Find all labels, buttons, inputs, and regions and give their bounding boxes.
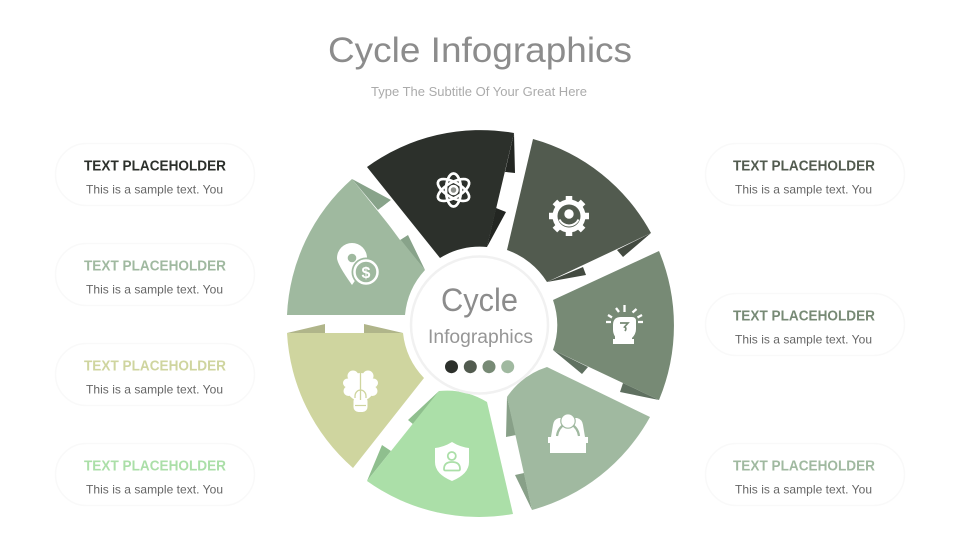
panel: left item 2: TEXT PLACEHOLDER xyxy=(84,258,226,274)
icon: shield with person xyxy=(435,442,469,481)
notch masks xyxy=(325,172,523,333)
panel: right item 3 xyxy=(706,444,904,506)
segment: dark with atom icon xyxy=(367,130,515,258)
icon: gear with person xyxy=(549,196,589,236)
panel: right item 2: This is a sample text. You xyxy=(735,332,872,346)
panel: left item 2: This is a sample text. You xyxy=(86,282,223,296)
panel: left item 4: This is a sample text. You xyxy=(86,482,223,496)
icon: raised fist with rays xyxy=(606,305,643,344)
icon: speaker at podium xyxy=(548,414,588,453)
panel: left item 4 xyxy=(56,444,254,506)
segment: olive with gear icon xyxy=(507,139,651,282)
panel: left item 1 xyxy=(56,144,254,206)
center subtitle: Infographics xyxy=(428,327,533,348)
panel: left item 2 xyxy=(56,244,254,306)
panel: left item 3 xyxy=(56,344,254,406)
subtitle: Type The Subtitle Of Your Great Here xyxy=(371,84,587,99)
panel: left item 3: TEXT PLACEHOLDER xyxy=(84,358,226,374)
panel: left item 1: TEXT PLACEHOLDER xyxy=(84,158,226,174)
panel: left item 1: This is a sample text. You xyxy=(86,182,223,196)
segment: green-grey with fist icon xyxy=(553,251,674,400)
panel: right item 2 xyxy=(706,294,904,356)
legend dots xyxy=(445,360,514,373)
segment: khaki with brain icon xyxy=(287,324,424,468)
icon: location pin with dollar: $ xyxy=(362,265,371,282)
center title: Cycle xyxy=(441,282,518,318)
panel: right item 3: TEXT PLACEHOLDER xyxy=(733,458,875,474)
center circle xyxy=(411,256,548,394)
panel: right item 1: This is a sample text. You xyxy=(735,182,872,196)
panel: right item 1 xyxy=(706,144,904,206)
panel: right item 3: This is a sample text. You xyxy=(735,482,872,496)
icon: atom xyxy=(435,174,472,206)
segment: mint with shield icon xyxy=(367,391,513,517)
segment: sage with podium icon xyxy=(506,367,650,510)
panel: left item 3: This is a sample text. You xyxy=(86,382,223,396)
panel: right item 1: TEXT PLACEHOLDER xyxy=(733,158,875,174)
segment: sage with pin icon xyxy=(287,179,425,315)
panel: right item 2: TEXT PLACEHOLDER xyxy=(733,308,875,324)
panel: left item 4: TEXT PLACEHOLDER xyxy=(84,458,226,474)
icon: brain lightbulb xyxy=(343,370,378,412)
title: Cycle Infographics xyxy=(328,31,632,70)
